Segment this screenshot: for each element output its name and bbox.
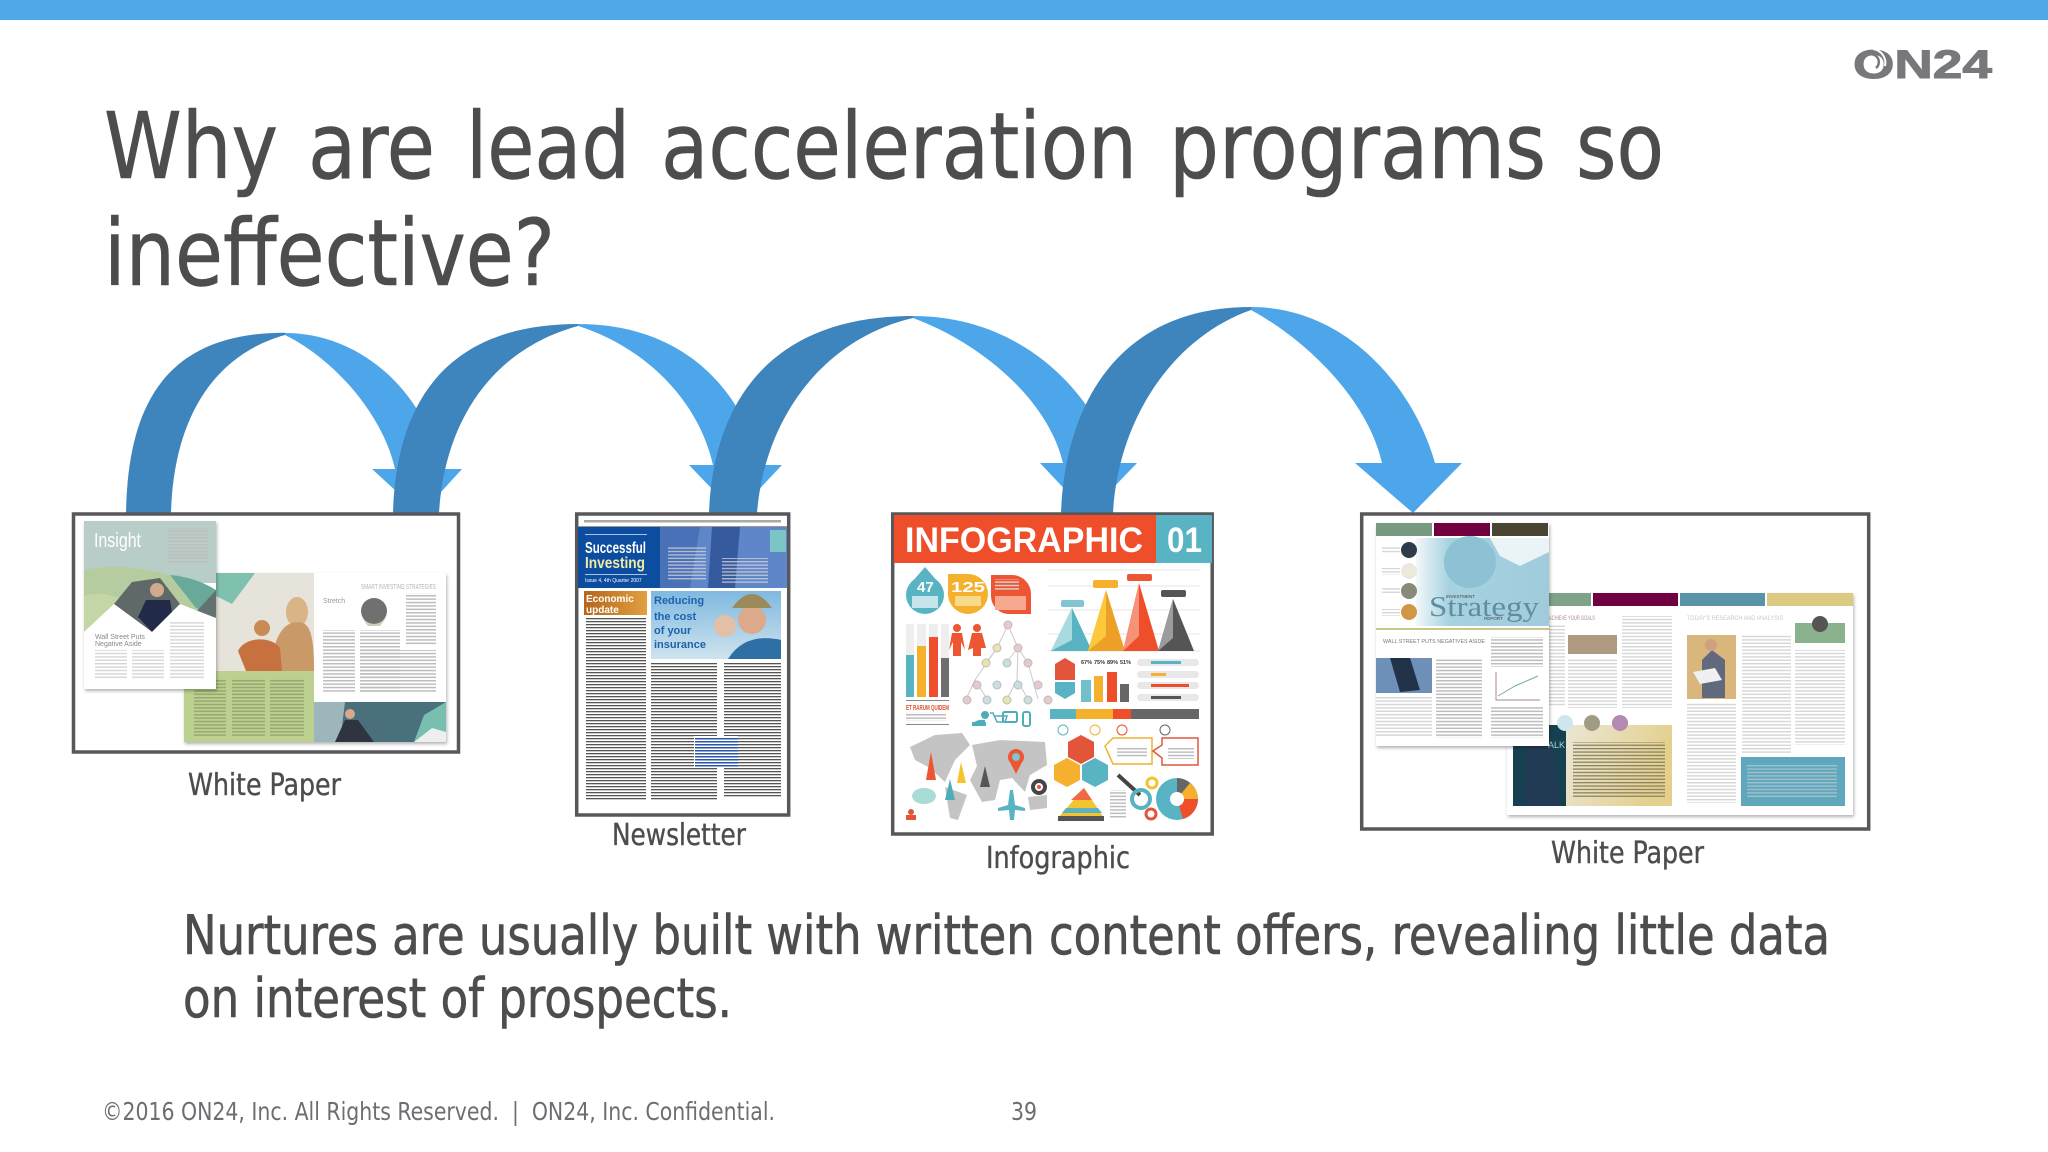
- strategy cover: INVESTMENT: [1446, 594, 1475, 599]
- label: smart investing strategies: SMART INVESTING STRATEGIES: [361, 584, 436, 591]
- stat badges: 47: [917, 579, 934, 596]
- strategy cover: Strategy: [1429, 591, 1540, 623]
- stat badges: 125: [951, 579, 985, 596]
- body text: on interest of prospects.: [183, 967, 732, 1030]
- teal info box: [1741, 757, 1845, 806]
- title: programs: [1169, 93, 1546, 200]
- hexagon labels and stacked bars: [1055, 658, 1131, 702]
- reducing insurance photo: [651, 591, 781, 659]
- stat badges: [906, 567, 1031, 614]
- label: white paper: White Paper: [188, 768, 342, 803]
- reducing insurance photo: insurance: [654, 639, 706, 651]
- strategy cover: WALL STREET PUTS NEGATIVES ASIDE: [1383, 639, 1485, 645]
- title: ineffective?: [104, 200, 555, 307]
- white paper spread: Stretch: [323, 598, 345, 605]
- panel: white paper thumbnail 2: [1362, 514, 1869, 829]
- economic update box: [584, 591, 647, 616]
- newsletter spread: TODAY'S RESEARCH AND ANALYSIS: [1687, 616, 1783, 622]
- white paper cover: [84, 521, 216, 689]
- arrow 4: into final white paper: [1061, 307, 1462, 513]
- masthead: Investing: [585, 555, 645, 572]
- masthead: [578, 527, 787, 588]
- title: [104, 93, 1664, 307]
- vertical bars: ET RARUM QUIDEM: [906, 705, 949, 712]
- triangle chart: [1048, 570, 1200, 651]
- title: so: [1576, 93, 1664, 200]
- hexagon labels and stacked bars: 75%: [1094, 660, 1105, 666]
- strategy cover: REPORT: [1484, 616, 1503, 621]
- arrow 2: newsletter to infographic: [393, 324, 782, 514]
- world map: [906, 733, 1047, 820]
- newsletter columns: [586, 617, 781, 800]
- hexagon labels and stacked bars: 51%: [1120, 660, 1131, 666]
- page number: 39: [1011, 1097, 1037, 1126]
- newsletter spread: ACHIEVE YOUR GOALS: [1549, 616, 1595, 622]
- people icon: [949, 624, 986, 656]
- panel: white paper thumbnail 1: [74, 514, 458, 752]
- infographic header: INFOGRAPHIC: [905, 521, 1143, 560]
- economic update box: Economic: [586, 594, 634, 605]
- reducing insurance photo: the cost: [654, 611, 697, 623]
- strategy cover: [1376, 523, 1549, 746]
- reducing insurance photo: of your: [654, 625, 692, 637]
- footer copyright: ©2016 ON24, Inc. All Rights Reserved. | ON24, Inc. Confidential.: [102, 1097, 775, 1126]
- infographic header: 01: [1167, 521, 1202, 560]
- body text: [183, 904, 1830, 1030]
- economic update box: update: [586, 605, 619, 616]
- vertical bars: [906, 624, 949, 725]
- hexagon labels and stacked bars: 67%: [1081, 660, 1092, 666]
- title: are: [308, 93, 435, 200]
- label: white paper: White Paper: [1551, 836, 1705, 871]
- top banner: [0, 0, 2048, 20]
- progress bars: [1137, 659, 1199, 701]
- white paper cover: Negative Aside: [95, 641, 142, 648]
- org tree: [963, 621, 1052, 704]
- masthead: Issue 4, 4th Quarter 2007: [585, 578, 642, 584]
- title: acceleration: [661, 93, 1137, 200]
- white paper cover: Wall Street Puts: [95, 634, 145, 641]
- body text: Nurtures are usually built with written content offers, revealing little data: [183, 904, 1830, 967]
- label: newsletter: Newsletter: [612, 818, 747, 853]
- reducing insurance photo: Reducing: [654, 595, 704, 607]
- title: Why: [104, 93, 278, 200]
- masthead: Successful: [585, 540, 646, 557]
- arrow 1: white paper to newsletter: [126, 333, 462, 514]
- title: lead: [466, 93, 630, 200]
- newsletter spread: [1507, 593, 1853, 815]
- pyramid, gears and pie chart: [1058, 775, 1198, 821]
- label: infographic: Infographic: [986, 841, 1130, 876]
- panel: infographic thumbnail: [893, 514, 1212, 834]
- timeline bar: [1050, 709, 1199, 735]
- hexagon labels and stacked bars: 89%: [1107, 660, 1118, 666]
- cover heading: Insight: Insight: [94, 530, 141, 552]
- infographic header: [894, 515, 1212, 563]
- icons row: [972, 711, 1030, 726]
- logo: ON24: ON24: [1853, 43, 1993, 87]
- pull-quote panel: [1513, 715, 1672, 806]
- panel: newsletter thumbnail: [577, 514, 789, 815]
- hexagons: [1054, 735, 1198, 787]
- white paper spread: [184, 573, 446, 742]
- pull-quote panel: ALK: [1548, 740, 1565, 750]
- arrow 3: infographic to white paper: [709, 316, 1137, 514]
